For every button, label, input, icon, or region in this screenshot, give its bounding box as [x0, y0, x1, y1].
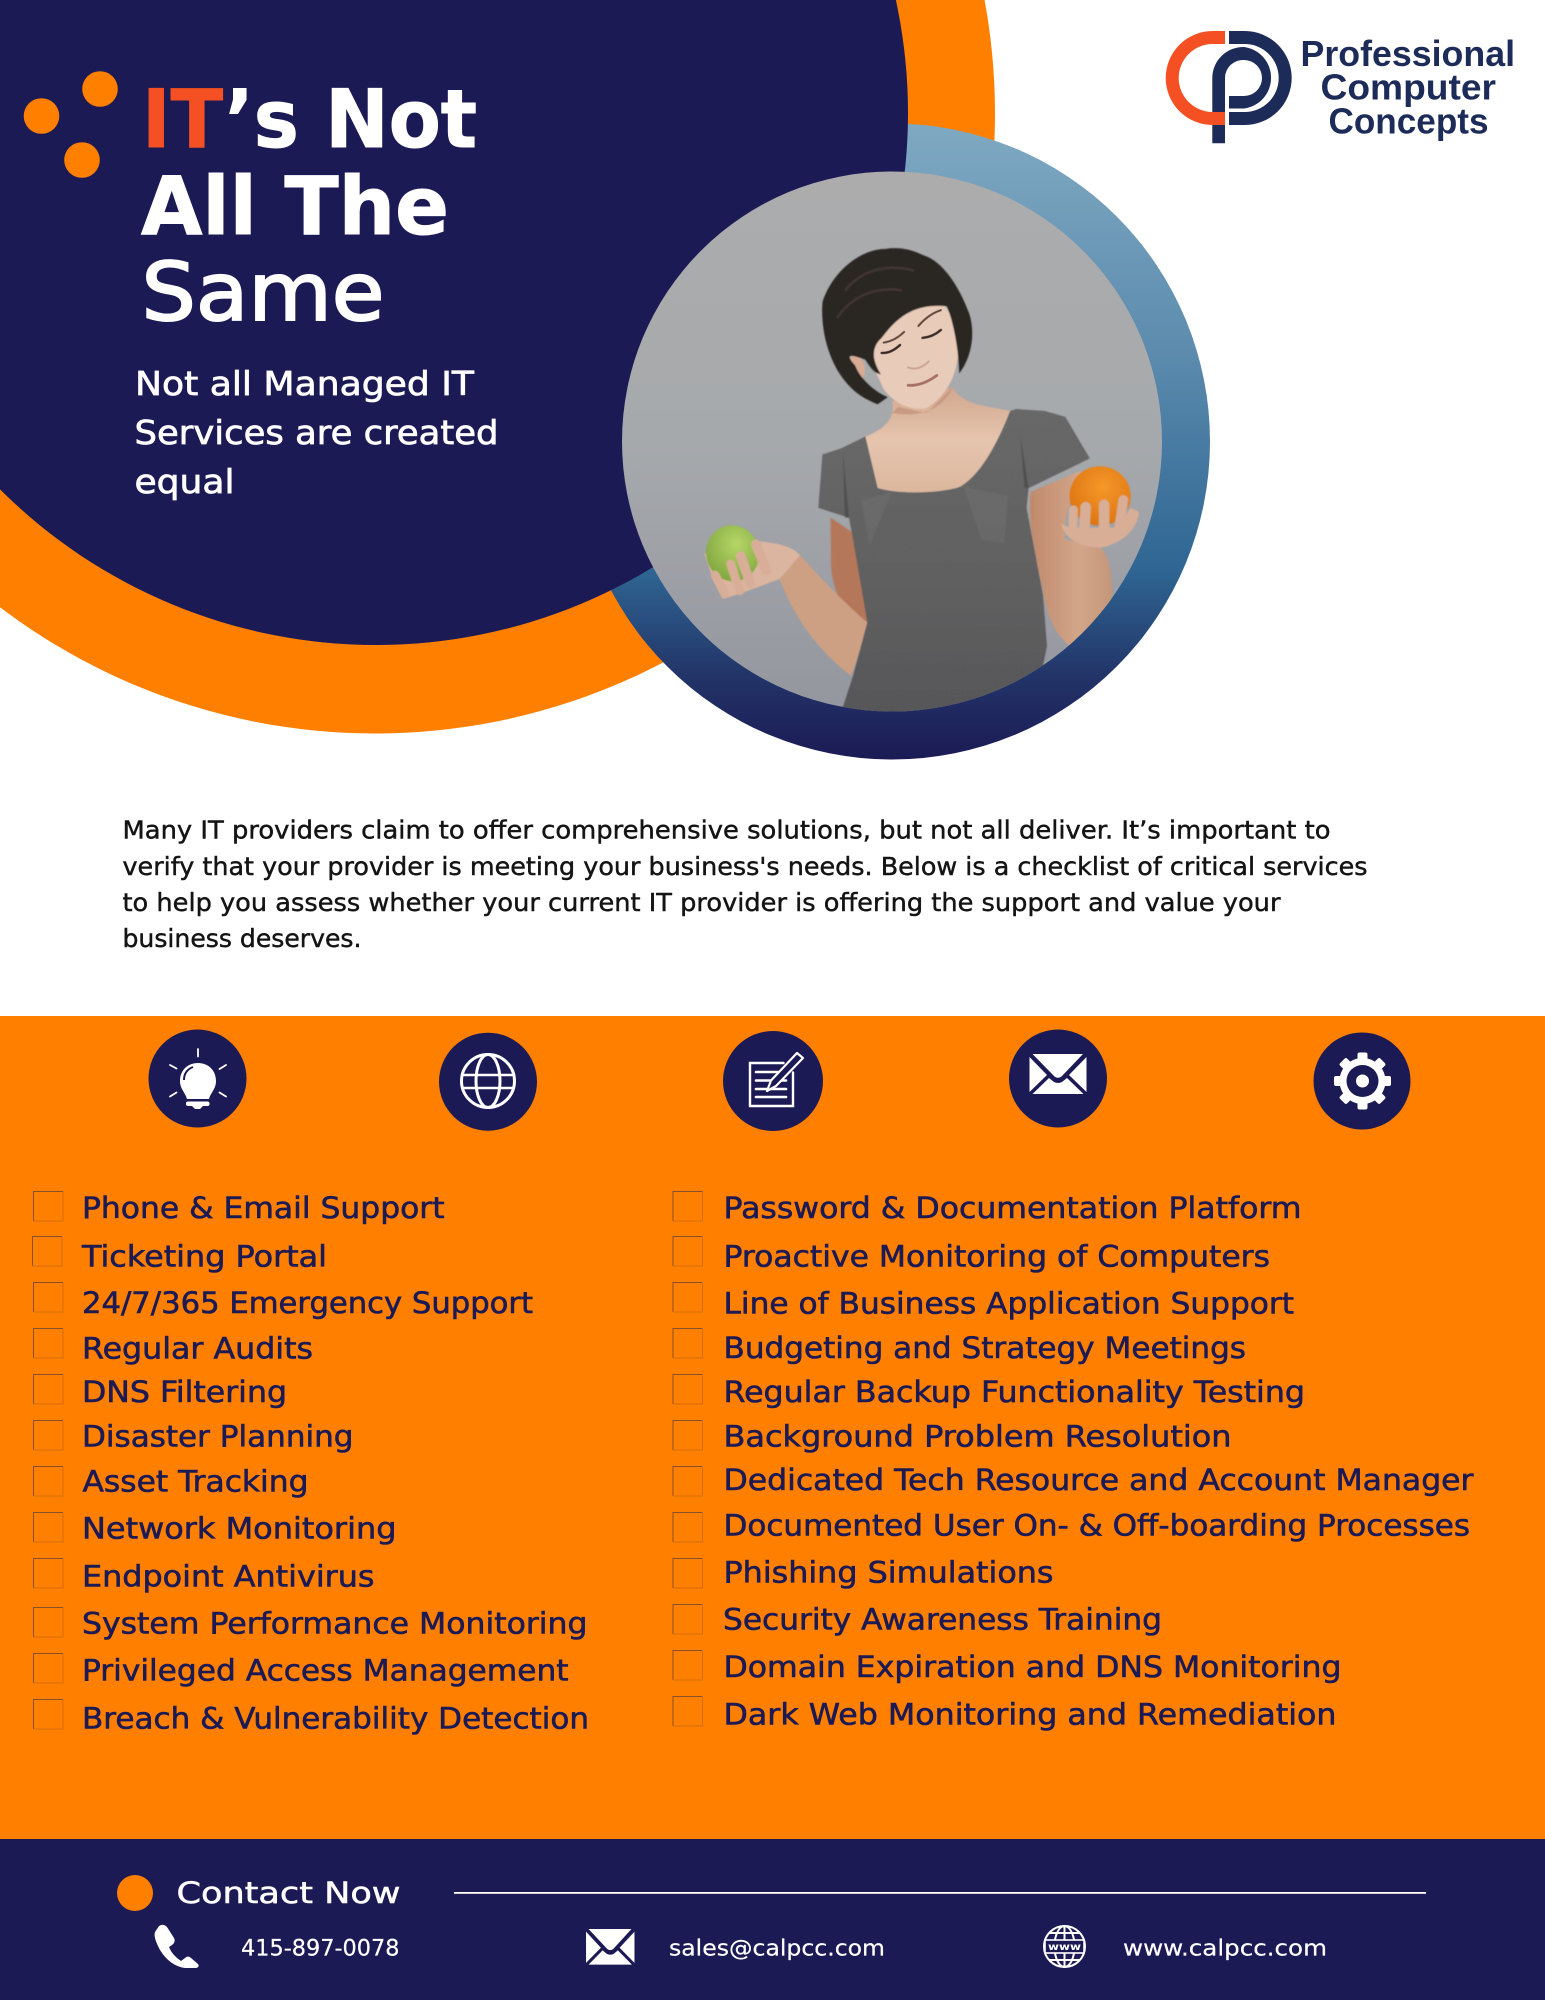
- item: System Performance Monitoring: System Performance Monitoring: [82, 1606, 588, 1640]
- contact heading: Contact Now: [176, 1876, 400, 1910]
- intro paragraph: to help you assess whether your current IT provider is offering the support and value your: [122, 888, 1281, 917]
- title: Same: [142, 246, 384, 339]
- item: Phishing Simulations: Phishing Simulations: [724, 1556, 1054, 1590]
- icon: gear: [1314, 1032, 1410, 1130]
- item: Dedicated Tech Resource and Account Manager: Dedicated Tech Resource and Account Manager: [724, 1463, 1474, 1497]
- intro paragraph: Many IT providers claim to offer comprehensive solutions, but not all deliver. It’s important to: [122, 816, 1330, 844]
- subtitle: Not all Managed IT: [135, 364, 475, 403]
- item: Ticketing Portal: Ticketing Portal: [81, 1240, 327, 1274]
- footer panel: [0, 1839, 1545, 2000]
- item: Phone & Email Support: Phone & Email Support: [82, 1191, 444, 1225]
- contact heading: [117, 1875, 1426, 1911]
- title: All The: [141, 160, 449, 253]
- item: Domain Expiration and DNS Monitoring: Domain Expiration and DNS Monitoring: [724, 1650, 1342, 1684]
- item: Ticketing Portal: [32, 1236, 327, 1274]
- item: Regular Audits: Regular Audits: [82, 1332, 313, 1366]
- contact: website: www.calpcc.com: [1123, 1936, 1327, 1962]
- contact: website: [1044, 1926, 1327, 1967]
- dots decoration: [24, 71, 118, 178]
- photo gradient ring: [574, 124, 1210, 760]
- item: Documented User On- & Off-boarding Processes: Documented User On- & Off-boarding Processes: [724, 1508, 1470, 1542]
- item: Endpoint Antivirus: Endpoint Antivirus: [82, 1560, 375, 1594]
- contact: website: www: [1048, 1942, 1081, 1953]
- checklist: right column: [673, 1191, 1474, 1732]
- item: Regular Backup Functionality Testing: Regular Backup Functionality Testing: [724, 1375, 1305, 1409]
- item: Security Awareness Training: Security Awareness Training: [723, 1602, 1162, 1636]
- subtitle: Services are created: [134, 413, 498, 452]
- item: Asset Tracking: Asset Tracking: [82, 1464, 308, 1498]
- icon: envelope: [1009, 1030, 1107, 1128]
- item: Line of Business Application Support: Line of Business Application Support: [724, 1286, 1294, 1320]
- item: Breach & Vulnerability Detection: Breach & Vulnerability Detection: [82, 1702, 589, 1736]
- subtitle: equal: [134, 462, 234, 501]
- icon: light bulb: [148, 1030, 246, 1128]
- subtitle: [134, 364, 498, 501]
- contact: phone: [155, 1925, 400, 1968]
- logo: Professional Computer Concepts: [1166, 31, 1515, 143]
- title: [141, 73, 477, 339]
- logo: Professional Computer Concepts: Computer: [1320, 66, 1496, 107]
- intro paragraph: verify that your provider is meeting your business's needs. Below is a checklist of critical services: [122, 852, 1367, 881]
- orange checklist panel: [0, 1016, 1545, 1839]
- item: Network Monitoring: Network Monitoring: [82, 1512, 396, 1546]
- item: Disaster Planning: Disaster Planning: [82, 1420, 354, 1454]
- item: Budgeting and Strategy Meetings: Budgeting and Strategy Meetings: [724, 1331, 1246, 1365]
- item: Background Problem Resolution: Background Problem Resolution: [724, 1420, 1232, 1454]
- background shapes: orange ring: [0, 0, 995, 734]
- title: IT: [142, 73, 223, 166]
- checklist: left column: [32, 1191, 589, 1736]
- intro paragraph: business deserves.: [122, 924, 362, 953]
- item: Proactive Monitoring of Computers: Proactive Monitoring of Computers: [724, 1240, 1270, 1274]
- contact: phone: 415-897-0078: [241, 1936, 400, 1962]
- icon: notepad and pencil: [723, 1031, 823, 1131]
- item: Regular Audits: [34, 1328, 313, 1366]
- icon: globe: [439, 1033, 537, 1131]
- intro paragraph: [122, 816, 1367, 953]
- contact: email: [586, 1929, 885, 1965]
- header navy circle: [0, 0, 908, 645]
- item: Privileged Access Management: Privileged Access Management: [82, 1654, 568, 1688]
- photo: woman comparing an apple and an orange: [620, 170, 1165, 715]
- logo: Professional Computer Concepts: Concepts: [1328, 100, 1488, 141]
- item: 24/7/365 Emergency Support: 24/7/365 Emergency Support: [82, 1286, 533, 1320]
- contact: email: sales@calpcc.com: [669, 1936, 885, 1962]
- logo: Professional Computer Concepts: Professional: [1300, 33, 1515, 74]
- item: DNS Filtering: DNS Filtering: [82, 1375, 287, 1409]
- item: Password & Documentation Platform: Password & Documentation Platform: [724, 1191, 1302, 1225]
- item: Dark Web Monitoring and Remediation: Dark Web Monitoring and Remediation: [724, 1698, 1336, 1732]
- title: ’s Not: [225, 73, 477, 166]
